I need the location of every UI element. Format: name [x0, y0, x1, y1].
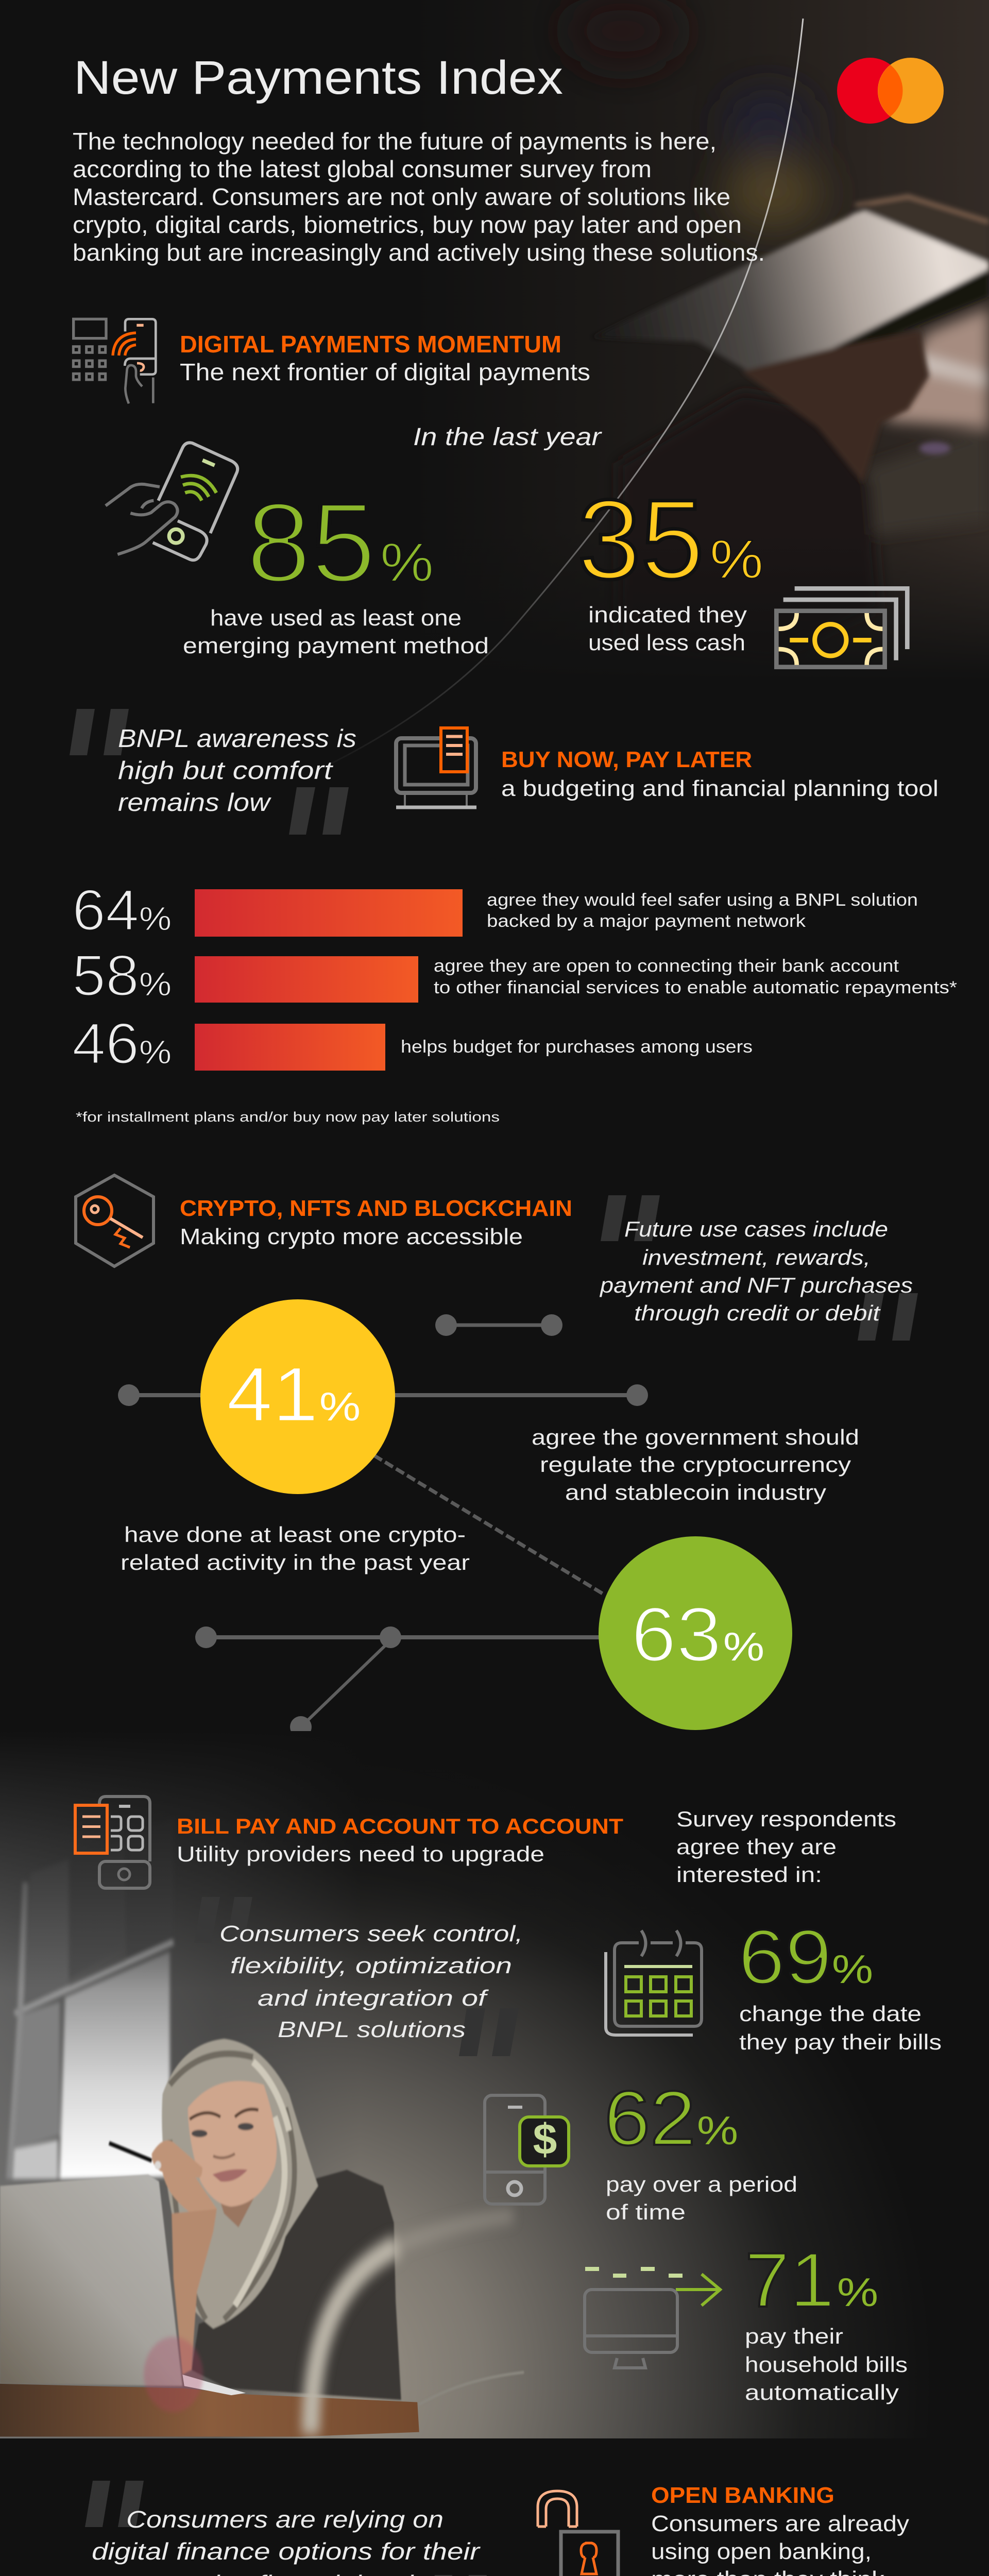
stat: 62% pay over a period: of time [606, 2200, 686, 2224]
quote: future use cases: Future use cases include [624, 1217, 888, 1241]
stat: 85% emerging payment method: % [380, 532, 434, 593]
quote: future use cases: through credit or debit [634, 1301, 881, 1325]
stat: 69% change the date [738, 1913, 942, 2054]
heading: digital payments momentum: DIGITAL PAYMENTS MOMENTUM [180, 331, 561, 358]
stat: 69% change the date: they pay their bills [739, 2030, 942, 2054]
intro text block: The technology needed for the future of payments is here, [73, 128, 717, 155]
stat circle: 41%: % [319, 1384, 361, 1429]
network graph connectors [118, 1314, 648, 1738]
icon: payment terminal and contactless phone [73, 319, 156, 403]
stat circle: 41% [200, 1299, 395, 1494]
quote: BNPL awareness: remains low [118, 789, 272, 817]
face [188, 2081, 277, 2207]
quote: BNPL awareness: high but comfort [118, 757, 334, 785]
icon: phone with dollar card: $ [533, 2115, 557, 2163]
subheading: in the last year: In the last year [413, 423, 602, 451]
decorative curved line [328, 19, 803, 765]
heading: crypto, NFTs and blockchain [180, 1196, 572, 1249]
stat: 62% pay over a period: pay over a period [606, 2172, 797, 2196]
hand and arm [152, 2140, 217, 2217]
quote: consumers seek control: flexibility, optimization [230, 1953, 512, 1978]
icon: open padlock [538, 2491, 618, 2576]
quote: digital finance options: Consumers are relying on [126, 2506, 444, 2533]
title: New Payments Index [74, 52, 563, 104]
bar: 64%: agree they would feel safer using a BNPL solution [487, 890, 918, 910]
photo: woman at laptop [0, 1731, 989, 2438]
bar: 46%: helps budget for purchases among users [401, 1037, 753, 1057]
stat: 35% less cash: indicated they [588, 602, 747, 628]
stat: 69% change the date: change the date [739, 2002, 922, 2026]
stat: 85% emerging payment method: emerging payment method [183, 633, 489, 658]
heading: open banking: OPEN BANKING [651, 2483, 834, 2508]
text: crypto activity: related activity in the past year [121, 1550, 470, 1574]
stat: 69% change the date: 69 [738, 1913, 832, 2000]
bar: 64% [72, 878, 918, 942]
sweater [192, 2170, 401, 2400]
stat: 85% emerging payment method: 85 [246, 479, 376, 606]
bar: 64%: % [139, 900, 172, 937]
icon: hand holding phone [106, 443, 237, 560]
heading: buy now pay later [501, 747, 939, 801]
stat: 71% household bills: household bills [745, 2352, 908, 2377]
quote: consumers seek control [194, 1897, 523, 2056]
bar: 58%: % [139, 965, 172, 1003]
heading: digital payments momentum [180, 331, 590, 385]
heading: open banking: using open banking, [651, 2539, 872, 2564]
icon: point of sale monitor with receipt [396, 728, 476, 807]
intro text block [73, 128, 765, 266]
heading: crypto, NFTs and blockchain: CRYPTO, NFTS AND BLOCKCHAIN [180, 1196, 572, 1221]
intro text block: Mastercard. Consumers are not only aware of solutions like [73, 183, 730, 210]
stat: 71% household bills: % [837, 2269, 878, 2315]
stat: 85% emerging payment method [183, 479, 489, 658]
bar: 64%: backed by a major payment network [487, 911, 806, 931]
heading: open banking [651, 2483, 909, 2576]
heading: buy now pay later: BUY NOW, PAY LATER [501, 747, 752, 772]
bar: 46% [72, 1011, 753, 1076]
quote: future use cases: payment and NFT purchases [599, 1273, 913, 1297]
icon: monitor with arrow [585, 2269, 720, 2368]
stat: 71% household bills [745, 2236, 908, 2404]
stat: 62% pay over a period [604, 2075, 797, 2224]
text: survey respondents: Survey respondents [676, 1807, 896, 1831]
text: crypto activity [121, 1522, 470, 1574]
icon: stack of banknotes [776, 588, 907, 667]
photo: hand holding smartphone [548, 0, 989, 645]
text: crypto activity: have done at least one crypto- [124, 1522, 466, 1547]
bar: 58%: 58 [72, 943, 139, 1008]
quote: digital finance options [85, 2481, 487, 2576]
icon: phone with dollar card [485, 2095, 569, 2204]
text: government regulation [532, 1425, 859, 1504]
bar: 46%: % [139, 1033, 172, 1071]
stat: 62% pay over a period: 62 [604, 2075, 696, 2161]
bar chart: BNPL [72, 878, 957, 1076]
icon: phone app with bill [75, 1797, 150, 1888]
quote: consumers seek control: Consumers seek control, [219, 1921, 523, 1946]
stat: 35% less cash: 35 [577, 476, 704, 603]
stat: 35% less cash: % [710, 529, 763, 590]
stat circle: 63% [599, 1536, 792, 1730]
heading: buy now pay later: a budgeting and financial planning tool [501, 776, 939, 801]
text: government regulation: and stablecoin industry [565, 1480, 826, 1504]
stat circle: 63%: 63 [631, 1591, 722, 1677]
heading: bill pay and account to account: Utility providers need to upgrade [177, 1842, 544, 1866]
heading: open banking: Consumers are already [651, 2511, 909, 2536]
quote: consumers seek control: and integration of [258, 1986, 489, 2011]
stat circle: 41%: 41 [227, 1351, 318, 1437]
stat: 71% household bills: automatically [745, 2380, 899, 2404]
stat: 35% less cash [577, 476, 763, 655]
heading: digital payments momentum: The next frontier of digital payments [180, 359, 590, 385]
text: survey respondents [676, 1807, 896, 1887]
footnote: *for installment plans and/or buy now pay later solutions [76, 1109, 500, 1125]
heading: bill pay and account to account [177, 1814, 623, 1866]
dashed link from 41 to 63 [374, 1455, 604, 1595]
bar: 58%: agree they are open to connecting their bank account [434, 956, 899, 976]
intro text block: according to the latest global consumer survey from [73, 156, 652, 182]
table [0, 2384, 419, 2437]
stat: 71% household bills: pay their [745, 2324, 843, 2348]
bar: 46%: 46 [72, 1011, 139, 1076]
quote: future use cases: investment, rewards, [642, 1245, 871, 1269]
heading: crypto, NFTs and blockchain: Making crypto more accessible [180, 1224, 523, 1249]
stat: 85% emerging payment method: have used as least one [210, 605, 462, 631]
text: survey respondents: interested in: [676, 1862, 822, 1887]
stat: 35% less cash: used less cash [588, 630, 745, 655]
stat: 62% pay over a period: % [697, 2108, 738, 2153]
icon: calendar [606, 1930, 702, 2035]
intro text block: banking but are increasingly and actively using these solutions. [73, 239, 765, 266]
quote: consumers seek control: BNPL solutions [278, 2017, 466, 2042]
text: government regulation: regulate the cryptocurrency [540, 1452, 851, 1477]
quote: future use cases [599, 1195, 918, 1341]
stat: 71% household bills: 71 [745, 2236, 834, 2323]
pen [109, 2143, 152, 2161]
logo: mastercard [837, 58, 944, 124]
quote: BNPL awareness [70, 709, 356, 835]
laptop [0, 2175, 182, 2386]
quote: digital finance options: digital finance options for their [92, 2538, 481, 2565]
text: government regulation: agree the government should [532, 1425, 859, 1449]
bar: 58% [72, 943, 957, 1008]
text: survey respondents: agree they are [676, 1835, 837, 1859]
bar: 58%: to other financial services to enable automatic repayments* [434, 978, 957, 997]
icon: hexagon with key [76, 1175, 154, 1266]
hair back [162, 2039, 318, 2329]
intro text block: crypto, digital cards, biometrics, buy now pay later and open [73, 211, 742, 238]
stat circle: 63%: % [723, 1624, 764, 1669]
bar: 64%: 64 [72, 878, 139, 942]
neck [220, 2198, 253, 2228]
quote: BNPL awareness: BNPL awareness is [118, 725, 356, 753]
heading: bill pay and account to account: BILL PAY AND ACCOUNT TO ACCOUNT [177, 1814, 623, 1838]
stat: 69% change the date: % [832, 1946, 873, 1992]
